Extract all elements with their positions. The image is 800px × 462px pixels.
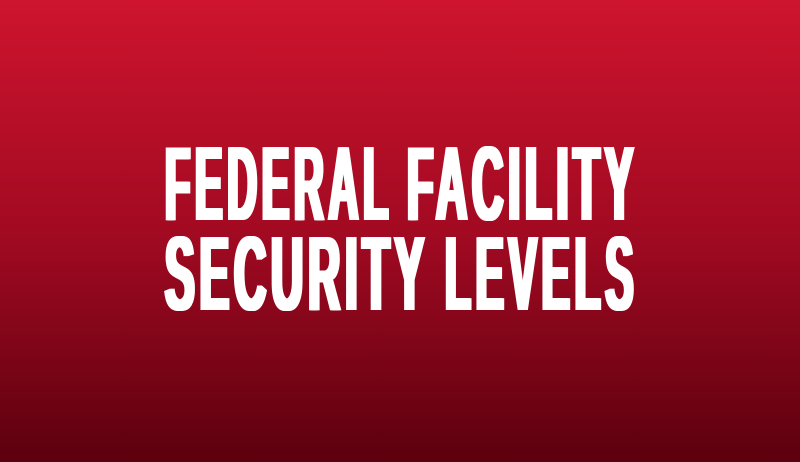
title <box>164 125 638 333</box>
title line 2: Security Levels: SECURITY <box>165 215 429 333</box>
title line 1: Federal Facility <box>165 125 638 243</box>
title line 1: Federal Facility: FEDERAL <box>165 125 393 243</box>
title line 1: Federal Facility: FACILITY <box>407 125 638 243</box>
title line 2: Security Levels <box>164 215 638 333</box>
title line 2: Security Levels: LEVELS <box>445 215 638 333</box>
